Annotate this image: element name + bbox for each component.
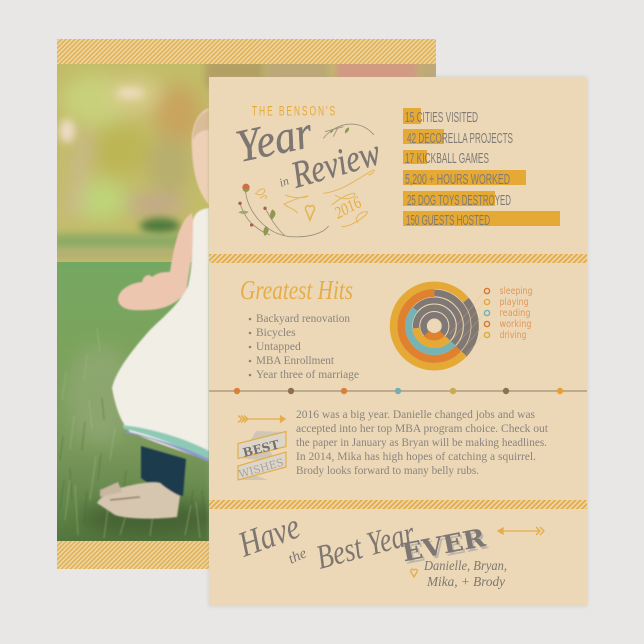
bar: decorella projects: 42 DECORELLA PROJECTS: [407, 131, 513, 147]
chart leader lines: [450, 292, 484, 358]
bottom striped band: [57, 541, 436, 569]
year 2016: 2016: [331, 192, 365, 223]
photo: child standing on grass: [52, 58, 444, 552]
banner: best wishes: BEST: [241, 437, 281, 460]
bar chart: year statistics: [403, 108, 560, 229]
list: greatest hits: MBA Enrollment: [256, 355, 335, 367]
bar: guests hosted: 150 GUESTS HOSTED: [406, 213, 490, 229]
text block: year summary: In 2014, Mika has high hopes of catching a squirrel.: [296, 451, 536, 463]
list: greatest hits: Untapped: [256, 341, 301, 353]
list: greatest hits: [249, 313, 359, 381]
legend: sleeping: sleeping: [500, 286, 533, 297]
dress hem trim: [122, 425, 209, 461]
top striped band: [57, 39, 436, 64]
timeline: [209, 388, 587, 394]
shoe: [97, 482, 180, 519]
decoration: botanical sprigs and flourishes: [238, 124, 374, 237]
signature: family names: [423, 559, 507, 590]
panel: front card: [209, 77, 587, 606]
legend: reading: reading: [500, 308, 531, 319]
title: Year in Review: Review: [286, 131, 386, 197]
closing message: Have the Best Year Ever: Best Year: [312, 515, 419, 577]
text block: year summary: accepted into her top MBA program choice. Check out: [296, 423, 549, 435]
list: greatest hits: Backyard renovation: [256, 313, 350, 325]
icon: small heart: [411, 569, 417, 577]
banner: best wishes: WISHES: [238, 457, 285, 481]
arm and hand: [118, 213, 195, 310]
bar: cities visited: 15 CITIES VISITED: [405, 110, 478, 126]
text block: year summary: [296, 409, 549, 477]
header: The Benson's: THE BENSON'S: [252, 104, 337, 118]
grass blades: [60, 328, 205, 538]
legend: playing: playing: [500, 297, 529, 308]
bar: hours worked: 5,200 + HOURS WORKED: [405, 172, 510, 188]
bar: kickball games: [403, 150, 489, 167]
text block: year summary: 2016 was a big year. Danielle changed jobs and was: [296, 409, 536, 421]
banner: best wishes: [238, 431, 286, 481]
list: greatest hits: Bicycles: [256, 327, 296, 339]
closing message: Have the Best Year Ever: Have: [232, 506, 305, 565]
list: greatest hits: Year three of marriage: [256, 369, 359, 381]
text block: year summary: the paper in January as Bryan will be making headlines.: [296, 437, 547, 449]
panel: photo card back: [52, 39, 444, 569]
closing message: Have the Best Year Ever: the: [286, 545, 310, 568]
title: Year in Review: Year: [231, 106, 317, 172]
title: Year in Review: [231, 106, 386, 197]
bar: decorella projects: [403, 129, 513, 147]
closing message: Have the Best Year Ever: EVER: [400, 523, 488, 567]
jeans: [141, 446, 186, 496]
bar: cities visited: [403, 108, 478, 126]
bar: kickball games: 17 KICKBALL GAMES: [405, 151, 489, 167]
arrow: right pointing: [238, 416, 285, 422]
heading: Greatest Hits: Greatest Hits: [240, 275, 353, 305]
divider: striped band one: [209, 254, 587, 263]
arrow: left pointing: [498, 527, 544, 535]
legend: working: working: [500, 319, 532, 330]
dress: [112, 208, 209, 461]
chart: radial activity chart: [394, 285, 475, 367]
signature: family names: Danielle, Bryan,: [423, 559, 507, 574]
legend: activities: [484, 286, 533, 341]
closing message: Have the Best Year Ever: [232, 506, 490, 577]
legend: driving: driving: [500, 330, 527, 341]
closing message: Have the Best Year Ever: EVER: [402, 525, 490, 570]
bar: hours worked: [403, 170, 526, 188]
bar: dog toys destroyed: 25 DOG TOYS DESTROYED: [407, 193, 511, 209]
signature: family names: Mika, + Brody: [426, 575, 506, 590]
panel: front card shadow: [209, 77, 587, 606]
hair and face: [192, 108, 209, 205]
title: Year in Review: in: [277, 173, 291, 190]
divider: striped band two: [209, 500, 587, 509]
bar: dog toys destroyed: [403, 191, 511, 209]
text block: year summary: Brody looks forward to many belly rubs.: [296, 465, 479, 477]
